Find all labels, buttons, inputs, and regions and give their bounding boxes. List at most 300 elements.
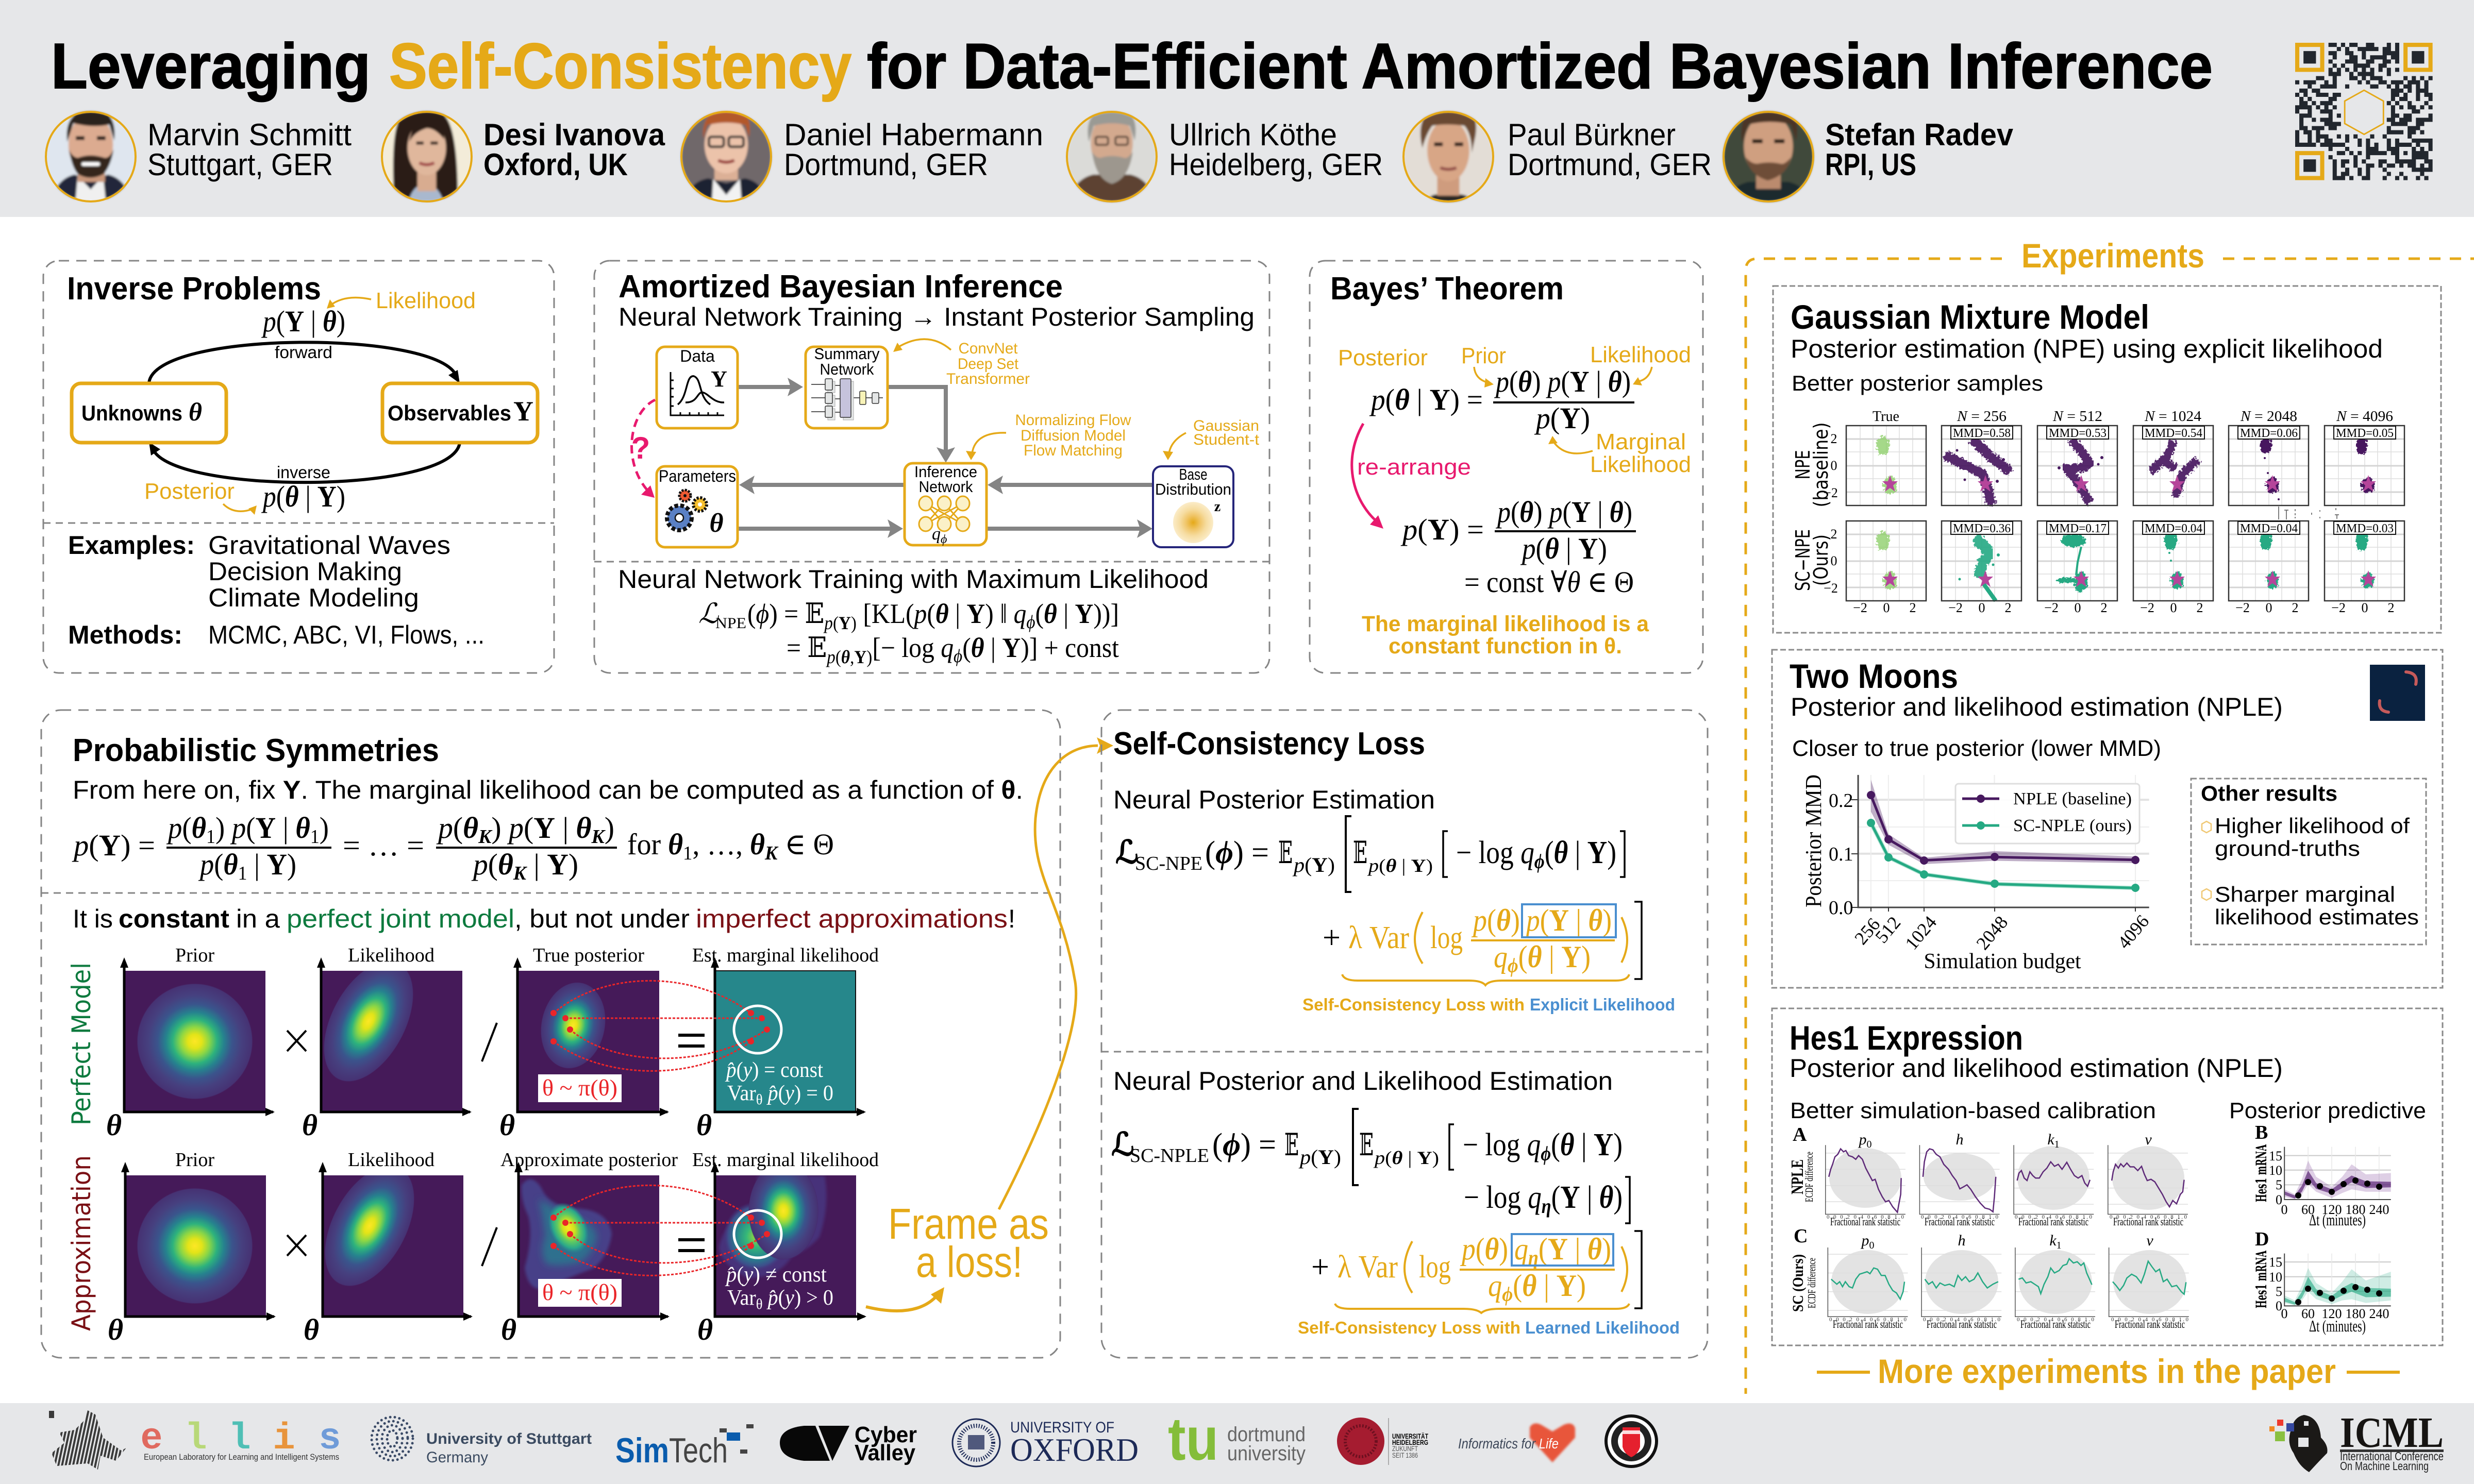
panel: inverse problems: [43, 261, 554, 673]
examples: Decision Making: [208, 557, 402, 586]
row labels: SC−NPE: [1792, 529, 1814, 591]
photo: Ullrich Köthe: [1068, 110, 1156, 203]
label: marginal likelihood: Likelihood: [1590, 452, 1691, 477]
formula: SC-NPLE loss: Y | θ): [1560, 1180, 1624, 1215]
parameter titles: 0: [1867, 1139, 1872, 1150]
heading: Experiments: [2021, 237, 2204, 275]
heading: Gaussian Mixture Model: [1791, 298, 2149, 336]
logo: University of Oxford: UNIVERSITY OF: [1010, 1419, 1114, 1436]
logo: ELLIS: i: [273, 1418, 295, 1460]
labels: posterior, prior, likelihood: Prior: [1461, 343, 1506, 368]
axis ticks: 0.0: [1829, 897, 1853, 919]
formula: bayes rule: [1369, 365, 1634, 435]
legend: [1955, 784, 2139, 844]
formula: SC-NPE loss: θ | Y): [1528, 940, 1592, 974]
logo: ICML: On Machine Learning: [2340, 1459, 2429, 1473]
scatter: NPE true: [1846, 426, 1926, 505]
x tick labels: [1827, 1214, 2188, 1323]
logo: SimTech: [615, 1424, 754, 1470]
line chart: posterior MMD: [1801, 774, 2153, 973]
chart: posterior predictive SC: 0: [2276, 1298, 2282, 1313]
scatter: SC 2048: MMD=0.04: [2240, 522, 2298, 535]
formula: SC-NPLE loss: p(Y): [1298, 1145, 1341, 1169]
logo: Cyber Valley: [780, 1422, 917, 1465]
re-arrange arrow: re-arrange: [1357, 454, 1471, 480]
formula: marginal symmetry: 1: [206, 826, 215, 848]
formula: NPE loss: p(Y): [824, 613, 857, 633]
line chart: posterior MMD: 2048: [1972, 912, 2012, 954]
x axis labels: Fractional rank statistic: [2020, 1318, 2091, 1330]
heading: Hes1 Expression: [1790, 1019, 2023, 1057]
label: likelihood: Likelihood: [376, 288, 476, 313]
box: summary network: [806, 345, 888, 428]
formula: NPE loss: [: [857, 598, 872, 629]
formula: SC-NPLE loss: θ | Y): [1522, 1269, 1587, 1303]
parameter titles: ν: [2145, 1131, 2152, 1148]
formula: NPE loss: [− log: [872, 632, 941, 663]
caption: learned likelihood: [1298, 1318, 1680, 1337]
panel: experiments frame: [1746, 237, 2474, 1394]
subheading: NPE: Neural Posterior Estimation: [1113, 785, 1435, 814]
x tick labels: 0.0 0.2 0.4 0.6 0.8 1.0: [2015, 1214, 2093, 1220]
equations: approximation: θ: [756, 1296, 763, 1312]
x tick labels: 0.0 0.2 0.4 0.6 0.8 1.0: [1923, 1317, 2001, 1323]
formula: SC-NPE loss: − log q: [1456, 835, 1536, 870]
scatter: NPE 1024: [2133, 426, 2213, 505]
sample mapping: approximation: [550, 1185, 781, 1275]
axis ticks: 0: [1831, 458, 1837, 473]
formula: NPE loss: q: [941, 632, 954, 663]
row label: perfect model: Perfect Model: [66, 963, 96, 1125]
logo: Cyber Valley: Valley: [855, 1440, 916, 1465]
formula: SC-NPLE loss: θ | Y): [1560, 1127, 1624, 1162]
parameter titles: [1858, 1131, 2153, 1251]
author names: Stefan Radev: [1825, 117, 2014, 152]
x tick labels: 0.0 0.2 0.4 0.6 0.8 1.0: [2110, 1214, 2187, 1220]
formula: bayes rule: p(θ) p(Y | θ): [1494, 365, 1631, 398]
formula: SC-NPLE loss: ℒ: [1111, 1127, 1134, 1162]
formula: NPE loss: (: [962, 632, 971, 663]
box: other results: Higher likelihood of: [2215, 814, 2410, 838]
axis labels theta: θ: [108, 1313, 123, 1346]
row labels: (Ours): [1810, 534, 1832, 586]
column titles: True: [1873, 408, 1899, 425]
logo: TU Dortmund: dortmund: [1227, 1423, 1306, 1446]
axis titles: Posterior MMD: [1801, 774, 1826, 907]
scatter: NPE 512: [2037, 426, 2117, 505]
text: constant claim: in a: [236, 904, 280, 933]
labels: posterior, prior, likelihood: [1338, 342, 1691, 370]
chart: posterior predictive NPLE: 15: [2269, 1149, 2282, 1163]
scatter: NPE 512: MMD=0.53: [2049, 427, 2107, 440]
subtitle: Posterior and likelihood estimation (NPLE): [1791, 693, 2283, 721]
equations: approximation: p̂: [763, 1286, 778, 1310]
training heading: Neural Network Training with Maximum Likelihood: [618, 565, 1209, 594]
arrow: inverse: [149, 442, 460, 482]
formula: marginal likelihood: p(Y) =: [1400, 513, 1484, 546]
axis ticks: −2: [2331, 600, 2346, 615]
scatter: NPE 4096: [2325, 426, 2404, 505]
logo: Informatics for Life: Informatics for Life: [1458, 1436, 1559, 1452]
axis ticks: 0: [2074, 600, 2081, 615]
parameter titles: ν: [2146, 1232, 2153, 1249]
box: inference network: [905, 463, 987, 546]
formula: SC-NPE loss: p(θ | Y): [1367, 855, 1433, 876]
logo: TU Dortmund: tu: [1168, 1405, 1218, 1473]
formula: marginal symmetry: |: [526, 848, 547, 881]
author names: Heidelberg, GER: [1169, 147, 1383, 182]
axis ticks: 0: [2362, 600, 2368, 615]
examples: MCMC, ABC, VI, Flows, ...: [208, 620, 484, 649]
formula: SC-NPLE loss: +: [1311, 1250, 1329, 1285]
brace: learned: [1335, 1304, 1629, 1313]
chart: posterior predictive NPLE: 120: [2321, 1202, 2342, 1217]
title: Leveraging: [51, 31, 371, 102]
formula: SC-NPLE loss: ϕ: [1541, 1142, 1551, 1165]
formula: NPE loss: ϕ: [954, 646, 962, 666]
formula: marginal symmetry: for θ: [627, 828, 683, 861]
examples: Gravitational Waves: [208, 531, 450, 560]
axis ticks: [1829, 790, 1853, 919]
scatter: NPE 4096: MMD=0.05: [2336, 427, 2394, 440]
author names: Dortmund, GER: [784, 147, 988, 182]
formula: SC-NPE loss: ℒ: [1115, 835, 1139, 870]
title: Self-Consistency: [389, 31, 851, 102]
arrow: posterior: [223, 504, 257, 515]
formula: marginal symmetry: p(Y) =: [72, 829, 155, 862]
formula: SC-NPE loss: 𝔼: [1278, 836, 1293, 870]
panel: amortized bayesian inference: [594, 261, 1269, 673]
equations: approximation: p̂(y) ≠ const: [725, 1263, 827, 1287]
axis ticks: [1824, 431, 2395, 615]
box: unknowns: θ: [189, 397, 202, 426]
formula: SC-NPE loss: (: [1518, 940, 1528, 974]
x tick labels: 0.0 0.2 0.4 0.6 0.8 1.0: [1827, 1214, 1904, 1220]
author names: Ullrich Köthe: [1169, 117, 1337, 152]
arrow: to self-consistency loss: [999, 737, 1113, 1209]
axis ticks: 0: [2170, 600, 2177, 615]
claim: calibration: Better simulation-based calibration: [1790, 1098, 2156, 1123]
author names: RPI, US: [1825, 147, 1916, 182]
axis ticks: 2: [1909, 600, 1916, 615]
row label: approximation: Approximation: [66, 1155, 96, 1331]
logo: TU Dortmund: [1168, 1405, 1306, 1473]
arrows: prior and likelihood: [1474, 367, 1652, 387]
logo: Heidelberg University: [1337, 1418, 1428, 1465]
formula: SC-NPE loss: SC-NPE: [1135, 853, 1202, 874]
column titles: [1873, 408, 2393, 425]
callout: frame as a loss: a loss!: [916, 1238, 1023, 1286]
logo: ELLIS: European Laboratory for Learning and Intelligent Systems: [144, 1452, 339, 1462]
parameter titles: h: [1955, 1131, 1964, 1148]
author names: Desi Ivanova: [483, 117, 665, 152]
caption: explicit likelihood: Explicit Likelihood: [1530, 995, 1675, 1014]
logo: Heidelberg University: UNIVERSITÄT: [1392, 1432, 1428, 1440]
x axis labels: Fractional rank statistic: [1927, 1318, 1997, 1330]
parameter titles: 1: [2057, 1240, 2062, 1251]
heatmap: likelihood (approximation): [306, 1150, 463, 1317]
arrow label: forward: forward: [275, 343, 332, 362]
claim: posterior predictive: Posterior predictive: [2229, 1098, 2426, 1123]
line chart: posterior MMD: 4096: [2113, 911, 2153, 953]
formula: SC-NPE loss: θ | Y): [1554, 835, 1618, 870]
caption: learned likelihood: Learned Likelihood: [1525, 1318, 1680, 1337]
logo: ICML: ICML: [2340, 1409, 2444, 1457]
equations: approximation: [725, 1263, 833, 1312]
panel letters: B: [2255, 1122, 2268, 1143]
box: summary network: Summary: [814, 345, 880, 363]
chart: posterior predictive SC: 240: [2369, 1306, 2389, 1321]
chart: posterior predictive SC: 0: [2281, 1306, 2287, 1321]
plot titles: Likelihood: [348, 1149, 434, 1171]
author photos: [56, 110, 1815, 203]
legend: SC-NPLE (ours): [2013, 816, 2132, 835]
chart: posterior predictive NPLE: [2253, 1144, 2391, 1229]
chart: posterior predictive SC: 120: [2321, 1306, 2342, 1321]
box: unknowns: [72, 383, 226, 443]
callout: constant function: The marginal likelihood is a: [1362, 612, 1649, 636]
label: marginal likelihood: Marginal: [1596, 429, 1686, 454]
icon: two moons thumbnail: [2370, 665, 2425, 721]
axis ticks: 2: [2197, 600, 2203, 615]
box: inference network: ϕ: [941, 533, 947, 546]
scatter: NPE 256: [1942, 426, 2021, 505]
photo: Desi Ivanova: [383, 110, 471, 203]
label: prior samples approximation: θ ~ π(θ): [542, 1280, 617, 1305]
examples: [68, 531, 484, 649]
box: base distribution: [1153, 465, 1233, 547]
box: unknowns: Unknowns: [81, 401, 182, 425]
formula: marginal symmetry: |: [247, 848, 267, 881]
axis ticks: 2: [2101, 600, 2107, 615]
y axis labels: NPLE: [1788, 1159, 1807, 1194]
box: data: [657, 347, 738, 428]
callout: constant function: constant function in θ.: [1389, 634, 1622, 659]
formula: marginal symmetry: θ: [750, 828, 765, 861]
formula: SC-NPLE loss: 𝔼: [1284, 1128, 1299, 1162]
box: observables: Y: [513, 396, 533, 427]
labels: summary network options: ConvNet: [959, 340, 1018, 357]
formula: marginal symmetry: p(θ: [473, 848, 513, 881]
formula: NPE loss: ϕ: [1026, 612, 1035, 632]
formula: SC-NPE loss: ϕ: [1534, 850, 1545, 873]
subtitle: Posterior estimation (NPE) using explicit likelihood: [1791, 334, 2383, 363]
logo: SimTech: Tech: [669, 1431, 728, 1470]
labels: inference network options: Flow Matching: [1024, 442, 1123, 459]
footer band: [0, 1403, 2474, 1484]
label: posterior: Posterior: [144, 479, 235, 504]
parameter titles: k: [2049, 1232, 2057, 1249]
callout: frame as a loss: Frame as: [888, 1200, 1049, 1248]
formula: SC-NPE loss: ϕ: [1508, 954, 1518, 977]
scatter: NPE 2048: MMD=0.06: [2240, 427, 2298, 440]
formula: NPE loss: θ | Y)] + const: [971, 632, 1128, 663]
scatter: SC true: [1846, 521, 1926, 601]
panel letters: [1793, 1122, 2269, 1250]
labels: inference network options: Normalizing Flow: [1015, 412, 1131, 429]
formula: SC-NPLE loss: (: [1539, 1232, 1548, 1266]
parameter titles: 0: [1869, 1240, 1874, 1251]
formula: SC-NPLE loss: − log q: [1464, 1180, 1544, 1215]
x axis labels: [1830, 1215, 2185, 1330]
photo: Marvin Schmitt: [56, 110, 126, 200]
x axis labels: Fractional rank statistic: [1830, 1215, 1900, 1228]
chart: posterior predictive NPLE: 5: [2276, 1177, 2282, 1192]
axis ticks: −2: [1824, 581, 1838, 596]
equations: approximation: (y) > 0: [778, 1286, 835, 1310]
examples: Methods:: [68, 620, 182, 649]
box: parameters: θ: [709, 509, 724, 538]
heatmap: prior (approximation): [125, 1175, 266, 1317]
text: constant claim: constant: [119, 904, 229, 933]
chart: posterior predictive NPLE: 240: [2369, 1202, 2389, 1217]
axis ticks: −2: [1824, 485, 1838, 500]
x axis labels: Fractional rank statistic: [2113, 1215, 2183, 1228]
logo: Heidelberg University: ZUKUNFT: [1392, 1444, 1418, 1453]
callout: constant function: [1362, 612, 1649, 659]
author names: Stuttgart, GER: [147, 147, 333, 182]
axis ticks: 0.2: [1829, 790, 1853, 812]
chart: posterior predictive NPLE: Hes1 mRNA: [2253, 1144, 2270, 1202]
x axis labels: Fractional rank statistic: [1833, 1318, 1903, 1330]
axis ticks: −2: [2140, 600, 2154, 615]
labels: base distribution options: Gaussian: [1193, 417, 1259, 434]
question mark arrow: ?: [631, 431, 650, 465]
equations: perfect: Var: [727, 1082, 757, 1105]
arrow: likelihood: [327, 297, 371, 309]
formula: SC-NPLE loss: p(θ): [1460, 1232, 1508, 1266]
logo: ELLIS: s: [319, 1418, 341, 1460]
panel: probabilistic symmetries: [41, 710, 1060, 1358]
axis labels theta: θ: [304, 1313, 319, 1346]
chart: posterior predictive SC: 10: [2269, 1270, 2282, 1285]
author names: Daniel Habermann: [784, 117, 1043, 152]
logo: University of Oxford: OXFORD: [1010, 1431, 1139, 1468]
parameter titles: p: [1862, 1232, 1869, 1249]
subtitle: Neural Network Training → Instant Posterior Sampling: [618, 302, 1255, 331]
column titles: N = 1024: [2144, 408, 2202, 425]
formula: SC-NPLE loss: (: [1551, 1180, 1560, 1215]
arrow: forward: [149, 342, 460, 383]
scatter: SC 2048: [2229, 521, 2309, 601]
logo: ELLIS: l: [228, 1418, 251, 1460]
x tick labels: 0.0 0.2 0.4 0.6 0.8 1.0: [2017, 1317, 2095, 1323]
logo: institution seal: [1604, 1414, 1658, 1468]
arrow: to frame as: [866, 1287, 944, 1311]
sample mapping: perfect: [550, 981, 781, 1071]
examples: Examples:: [68, 531, 195, 560]
box: base distribution: z: [1214, 499, 1221, 515]
axis labels theta: θ: [697, 1313, 713, 1346]
text: constant claim: It is: [73, 904, 113, 933]
formula: NPE loss: [698, 598, 1119, 667]
heading: Amortized Bayesian Inference: [618, 269, 1063, 305]
plot titles: True posterior: [533, 945, 644, 966]
chart: posterior predictive SC: [2253, 1250, 2391, 1335]
heading: Bayes’ Theorem: [1330, 271, 1564, 307]
heading: Two Moons: [1790, 657, 1958, 695]
axis ticks: −2: [2235, 600, 2250, 615]
panel: two moons: [1772, 650, 2443, 988]
formula: NPE loss: KL(p(θ | Y) ‖ q: [872, 598, 1028, 629]
row labels: NPE: [1792, 450, 1814, 479]
formula: marginal likelihood: = const ∀θ ∈ Θ: [1464, 565, 1634, 599]
formula: SC-NPE loss: 𝔼: [1353, 836, 1367, 870]
arrows between network boxes: [738, 378, 1153, 538]
panel letters: A: [1793, 1124, 1807, 1145]
parameter titles: 1: [2054, 1139, 2060, 1150]
chart: posterior predictive NPLE: 10: [2269, 1163, 2282, 1178]
plot titles: Approximate posterior: [500, 1149, 678, 1171]
chart: posterior predictive NPLE: Δt (minutes): [2309, 1210, 2366, 1229]
x axis labels: Fractional rank statistic: [2115, 1318, 2185, 1330]
text: constant claim: [73, 904, 1015, 933]
scatter: SC 512: MMD=0.17: [2049, 522, 2107, 535]
text: constant claim: , but not under: [514, 904, 690, 933]
formula: marginal symmetry: [72, 811, 834, 884]
box: other results: Sharper marginal: [2215, 882, 2395, 906]
arrow label: inverse: inverse: [277, 463, 330, 482]
panel: self-consistency loss: [1101, 710, 1708, 1358]
formula: SC-NPLE loss: η: [1528, 1246, 1539, 1269]
box: other results: likelihood estimates: [2215, 905, 2419, 929]
axis ticks: 2: [1831, 431, 1837, 446]
author names: [147, 117, 2014, 182]
text: constant claim: perfect joint model: [287, 904, 514, 933]
logo: SimTech: Sim: [615, 1431, 669, 1470]
formula: SC-NPLE loss: η: [1542, 1194, 1551, 1218]
formula: marginal symmetry: K: [478, 826, 493, 848]
axis labels theta: θ: [302, 1108, 317, 1142]
x tick labels: 0.0 0.2 0.4 0.6 0.8 1.0: [1829, 1317, 1907, 1323]
panel: bayes theorem: [1310, 261, 1703, 673]
formula: marginal symmetry: ): [320, 811, 329, 845]
box: parameters: [657, 466, 738, 547]
axis labels theta: θ: [106, 1108, 122, 1142]
claim: Closer to true posterior (lower MMD): [1792, 736, 2161, 761]
axis ticks: 0: [1831, 553, 1837, 568]
brace: explicit: [1342, 974, 1629, 985]
logo: Heidelberg University: HEIDELBERG: [1392, 1438, 1428, 1446]
formula: SC-NPLE loss: q: [1488, 1269, 1502, 1303]
logo: ELLIS: [49, 1410, 341, 1470]
plot titles: Prior: [175, 945, 214, 966]
formula: NPE loss: = 𝔼: [787, 632, 830, 663]
line chart: posterior MMD: 512: [1871, 913, 1904, 947]
logo: ICML: [2269, 1409, 2444, 1473]
icon: gears: [667, 490, 707, 530]
scatter: NPE 2048: [2229, 426, 2309, 505]
row labels: (baseline): [1810, 423, 1832, 507]
formula: SC-NPE loss: p(θ): [1471, 903, 1520, 937]
heading: Probabilistic Symmetries: [73, 733, 439, 768]
panel: hes1 expression: [1772, 1008, 2443, 1345]
panel letters: D: [2255, 1228, 2269, 1250]
heading: Self-Consistency Loss: [1113, 726, 1425, 762]
formula: marginal symmetry: Y): [267, 848, 297, 881]
photo: Stefan Radev: [1723, 103, 1814, 213]
formula: SC-NPLE loss: log: [1419, 1250, 1451, 1285]
text: fix Y: From here on, fix Y. The marginal likelihood can be computed as a function of θ.: [73, 775, 1023, 804]
chart: posterior predictive SC: 180: [2345, 1306, 2366, 1321]
plot titles: [175, 945, 879, 1171]
axis labels theta: θ: [499, 1108, 515, 1142]
QR code: [2295, 45, 2433, 178]
labels: inference network options: [1015, 412, 1131, 459]
formula: SC-NPLE loss: p(θ | Y): [1373, 1148, 1439, 1168]
logo: ELLIS: e: [140, 1418, 163, 1460]
x axis labels: Fractional rank statistic: [1925, 1215, 1995, 1228]
